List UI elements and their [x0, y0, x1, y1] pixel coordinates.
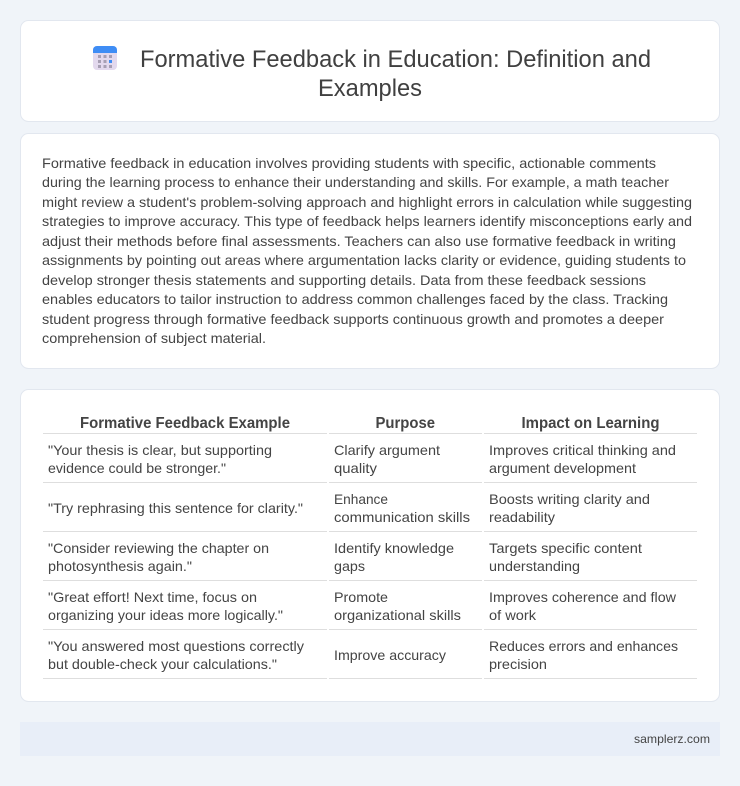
table row 2: Boosts writing clarity and: [489, 491, 650, 507]
table row 4: organizational skills: [334, 607, 461, 623]
table row 3: [48, 540, 642, 574]
panel: title header: [20, 20, 720, 122]
text block: description paragraph: comprehension of subject material.: [42, 330, 266, 346]
table row 1: quality: [334, 460, 377, 476]
table row 3: understanding: [489, 558, 580, 574]
table row 5: [48, 638, 678, 672]
table header row: [80, 415, 660, 432]
table row 4: "Great effort! Next time, focus on: [48, 589, 257, 605]
text block: description paragraph: during the learning process to enhance their understanding and skills. For example, a math teacher: [42, 174, 669, 190]
table row 1: "Your thesis is clear, but supporting: [48, 442, 272, 458]
text block: description paragraph: adjust their methods before final assessments. Teachers can also use formative feedback in writing: [42, 233, 676, 249]
table row 5: precision: [489, 656, 547, 672]
table row 3: gaps: [334, 558, 365, 574]
table row 3: photosynthesis again.": [48, 558, 192, 574]
table row 5: Improve accuracy: [334, 647, 446, 663]
text block: description paragraph: develop stronger thesis statements and supporting details. Data from these feedback sessions: [42, 272, 646, 288]
table row 1: evidence could be stronger.": [48, 460, 226, 476]
table row 2: Enhance: [334, 491, 388, 507]
panel: introduction text: [20, 134, 720, 368]
table row 3: Identify knowledge: [334, 540, 454, 556]
table row 2: communication skills: [334, 509, 470, 525]
table row 1: Improves critical thinking and: [489, 442, 676, 458]
table rules: [43, 434, 697, 678]
text block: description paragraph: Formative feedback in education involves providing students with specific, actionable comments: [42, 155, 656, 171]
footer bar: [20, 722, 720, 756]
title: Examples: [318, 75, 422, 102]
table row 3: Targets specific content: [489, 540, 642, 556]
title: Formative Feedback in Education: Definition and: [140, 46, 651, 73]
table row 2: readability: [489, 509, 555, 525]
text block: description paragraph: assignments by pointing out areas where argumentation lacks clarity or evidence, guiding students to: [42, 252, 686, 268]
title: [140, 46, 651, 102]
table row 3: "Consider reviewing the chapter on: [48, 540, 269, 556]
table row 4: Promote: [334, 589, 388, 605]
icon: calendar: [93, 46, 117, 70]
footer source text: samplerz.com: [634, 732, 710, 746]
table row 1: argument development: [489, 460, 636, 476]
table row 4: Improves coherence and flow: [489, 589, 677, 605]
text block: description paragraph: [42, 155, 692, 346]
table row 4: [48, 589, 677, 623]
table row 4: organizing your ideas more logically.": [48, 607, 283, 623]
table row 1: Clarify argument: [334, 442, 440, 458]
table row 2: [48, 491, 650, 525]
table row 5: but double-check your calculations.": [48, 656, 277, 672]
table row 1: [48, 442, 676, 476]
panel: feedback table: [20, 390, 720, 702]
table header row: Formative Feedback Example: [80, 415, 290, 432]
text block: description paragraph: strategies to improve accuracy. This type of feedback helps learners identify misconceptions early and: [42, 213, 692, 229]
table row 2: "Try rephrasing this sentence for clarity.": [48, 500, 303, 516]
table row 5: "You answered most questions correctly: [48, 638, 304, 654]
table header row: Impact on Learning: [522, 415, 660, 432]
text block: description paragraph: might review a student's problem-solving approach and highlight errors in calculation while suggesting: [42, 194, 692, 210]
table row 4: of work: [489, 607, 537, 623]
table row 5: Reduces errors and enhances: [489, 638, 678, 654]
text block: description paragraph: student progress through formative feedback supports continuous growth and promotes a deeper: [42, 311, 664, 327]
table header row: Purpose: [376, 415, 435, 432]
text block: description paragraph: enables educators to tailor instruction to address common challenges faced by the class. Tracking: [42, 291, 668, 307]
